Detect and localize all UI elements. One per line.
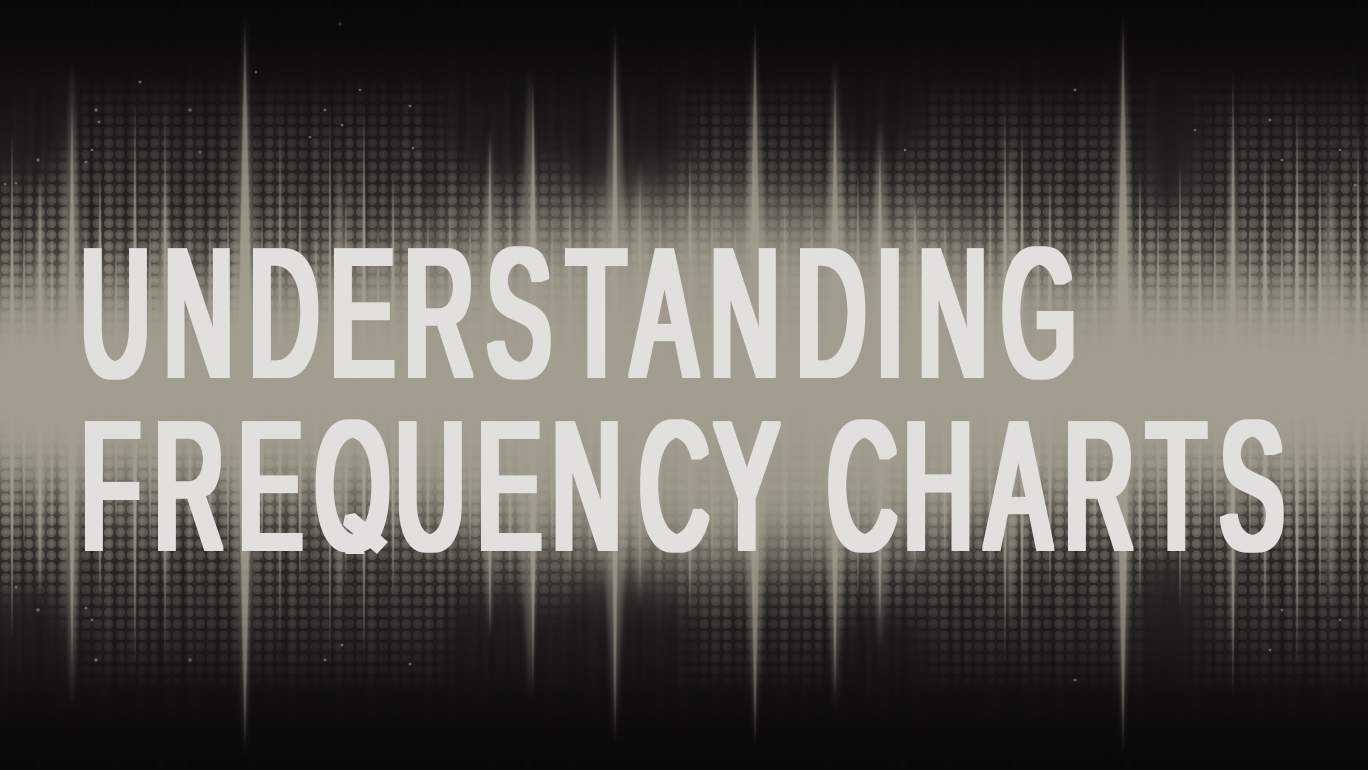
dark vertical streak texture xyxy=(1,106,1368,660)
wide soft glow envelope xyxy=(0,212,1368,558)
Q tail stroke xyxy=(343,513,388,554)
central solid band xyxy=(0,330,1368,440)
title line 2: FREQUENCY CHARTS xyxy=(82,383,1284,588)
waveform spikes: short fine layer xyxy=(21,170,1345,600)
title xyxy=(84,246,1284,554)
halftone dot field xyxy=(0,98,1368,672)
title line 1: UNDERSTANDING xyxy=(81,210,1076,415)
